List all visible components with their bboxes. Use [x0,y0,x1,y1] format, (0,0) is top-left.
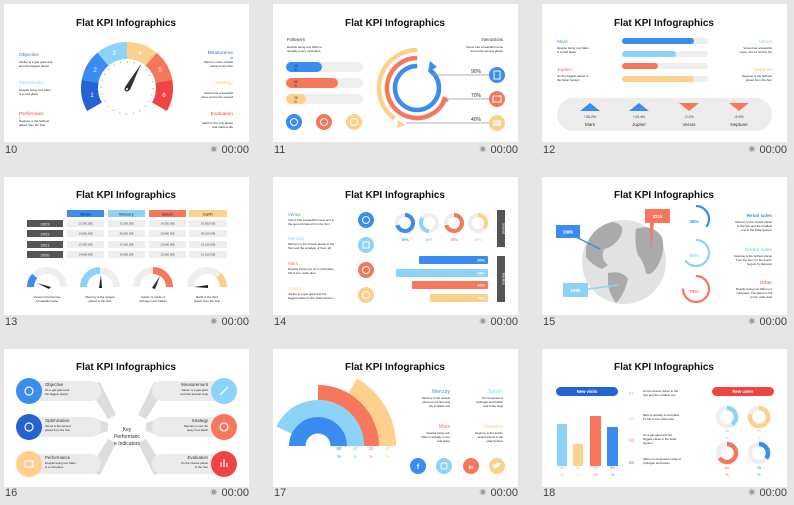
table: 16,650.00$ [201,222,215,226]
table: 14,600.00$ [78,252,93,256]
left list: Despite being red, it's a cold place, [288,267,335,271]
left text: Jupiter [557,67,572,73]
percent labels: 20 [385,446,390,451]
callouts [556,209,670,297]
table: Earth [203,212,213,216]
new visits: 55 [610,465,615,470]
title: Flat KPI Infographics [76,18,176,29]
slide 15: globe: 35% [689,219,699,224]
right texts: Measureme [208,50,233,56]
slide 14: donuts and bars: 70% [450,238,458,242]
slide 10: gauge: Despite being red, Mars [19,88,51,92]
text blocks: and it has rings [483,404,504,408]
table: 23,600.00$ [160,242,175,246]
left list: Mercury [288,236,305,241]
list: It's the closest planet to the [643,389,678,393]
title: Flat KPI Infographics [614,190,714,201]
percent labels [337,446,390,459]
connectors [88,382,166,475]
slide 10: gauge: 6 [162,92,166,99]
time 11: ✷ 00:00 [478,144,518,156]
center text: Key [123,427,132,433]
table: 15,600.00$ [160,252,175,256]
left list: the second planet from the Sun [288,222,330,226]
title: Flat KPI Infographics [345,362,445,373]
time 13: ✷ 00:00 [209,316,249,328]
slide 10: gauge: 5 [158,67,162,74]
trend pill [557,98,772,131]
right texts: Strategy [215,80,234,86]
circles [16,378,237,477]
trend pill: Neptune [730,122,748,127]
label 16: 16 [5,487,17,499]
left text: It's the biggest planet in [557,74,589,78]
table: 2022 [41,231,50,236]
slide 14: donuts and bars: 70% [401,238,409,242]
left texts: Optimizatio [19,80,43,86]
slide 10: gauge: name and is the second [201,95,233,99]
slide 11: followers/interactions: 70% [471,93,482,99]
table: 14,560.00$ [120,252,134,256]
table: 2023 [41,221,50,226]
list [629,389,681,465]
right text: to the Sun and the smallest [737,224,772,228]
list: Mars is actually a cold place, [643,413,680,417]
bars: 45 [294,64,298,68]
right text: Neptune is the farthest [742,74,772,78]
label 13: 13 [5,316,17,328]
right text: Venus [759,39,773,45]
bars: % [294,100,297,104]
icons [286,114,362,130]
right text [739,39,773,82]
text blocks: It's composed of [482,396,503,400]
right texts: Evaluation [211,111,233,117]
list: Saturn is composed mostly of [643,457,681,461]
list: It's a gas giant and the [643,433,672,437]
percent labels: % [337,454,341,459]
slide 11: followers/interactions [273,4,518,142]
title: Flat KPI Infographics [614,362,714,373]
slide 18: visits and users [542,349,787,487]
slide 10: gauge: planet to the Sun [210,64,233,68]
bars: 40% [477,296,486,300]
new users [712,387,774,477]
pills [29,381,224,474]
slide 13: table and gauges [4,177,249,315]
time 14: ✷ 00:00 [478,316,518,328]
bars: % [294,84,297,88]
text blocks: largest planet in the [478,435,503,439]
social icons: in [469,465,474,471]
slide 12: bars and trends [542,4,787,142]
list: 03 [629,438,635,443]
tabs: Mention [501,273,505,285]
texts: is a cold place [45,465,64,469]
trend pill: Mars [585,122,596,127]
table: Saturn [162,212,173,216]
right texts: nt [230,56,233,60]
left texts: n [19,84,21,88]
table: 14,250.00$ [160,222,175,226]
trend pill: +35.2% [584,115,597,119]
rings [364,35,470,141]
label 18: 18 [543,487,555,499]
left list: Jupiter [288,286,302,291]
right text: Online sales [745,247,772,252]
right text: of iron oxide dust [750,295,772,299]
bars: 65% [477,272,486,276]
new visits: 70 [593,465,598,470]
followers text: actually a very cold place [287,49,321,53]
left list: Venus has a beautiful name and is [288,218,334,222]
slide 11: followers/interactions: 90% [471,69,482,75]
table: 2020 [41,252,50,257]
slide 16: key performance indicators: Saturn is a gas giant [182,388,208,392]
label 10: 10 [5,144,17,156]
texts: It's a gas giant and [45,388,70,392]
text blocks: Mars [439,424,450,430]
new visits: % [576,472,580,477]
title: Flat KPI Infographics [345,190,445,201]
new users: % [725,472,729,477]
new users: 80 [757,428,762,433]
right text: cold place. The planet is full [736,291,772,295]
trend pill: Jupiter [632,122,646,127]
tabs [497,210,505,302]
new users: % [757,472,761,477]
percent labels: % [353,454,357,459]
center text: Performanc [114,434,140,440]
callouts: 288k [563,230,574,234]
table: 13,300.00$ [78,222,93,226]
title: Flat KPI Infographics [345,18,445,29]
text blocks: Mercury is the closest [422,396,450,400]
bars [286,62,363,104]
interactions text: Venus has a beautiful name [466,45,503,49]
bars [396,256,488,302]
left text: is a cold place [557,50,576,54]
texts: planet from the Sun [45,428,71,432]
center text [114,427,140,447]
trend pill: -2.2% [684,115,694,119]
percent labels: % [385,454,389,459]
bars [622,38,708,82]
text blocks [421,389,504,443]
table: 45,150.00$ [201,232,215,236]
slide 10: gauge: that harbors life [212,125,233,129]
bars: % [294,68,297,72]
rings [683,206,709,302]
slide 10: gauge: 4 [138,50,142,57]
text blocks: Neptune is the fourth- [475,431,503,435]
percent labels: 40 [353,446,358,451]
slide 10: gauge: Earth is the only planet [202,121,233,125]
left list: Sun and the smallest of them all [288,246,331,250]
text blocks: Neptune [484,424,503,430]
text blocks: the smallest one [429,404,450,408]
left list [288,212,335,300]
label 15: 15 [543,316,555,328]
new visits: 60 [560,465,565,470]
new users: % [725,435,729,440]
left text: the Solar System [557,78,580,82]
slide 13: table and gauges: a beautiful name [36,299,58,303]
new users: 65 [725,465,730,470]
list: 04 [629,460,635,465]
table [27,210,227,258]
right text: from the Sun. It's the fourth- [736,258,772,262]
social icons: f [417,464,420,471]
callouts: 321k [652,214,663,219]
slide 10: gauge: Venus has a beautiful [204,91,233,95]
left list: full of iron oxide dust [288,271,316,275]
new visits [556,387,618,477]
table: 14,560.00$ [78,232,93,236]
followers text: Followers [287,37,305,42]
list: 02 [629,416,635,421]
percent labels: 50 [337,446,342,451]
interactions text: Interactions [481,37,503,42]
texts: the biggest planet [45,392,68,396]
table: 2021 [41,242,50,247]
percent labels: 30 [369,446,374,451]
new visits: % [594,472,598,477]
lines [406,75,497,123]
bars: 65 [294,80,298,84]
slide 10: gauge: is a cold place [19,92,38,96]
label 17: 17 [274,487,286,499]
label 14: 14 [274,316,286,328]
right text: planet from the Sun [746,78,772,82]
left list: Mars [288,261,299,266]
text blocks: Mars is actually a very [421,435,451,439]
title: Flat KPI Infographics [614,18,714,29]
right text: Venus has a beautiful [743,46,772,50]
list: System [643,441,653,445]
table: 19,150.00$ [201,242,215,246]
text blocks: Mercury [432,389,450,395]
slide 13: table and gauges: Earth is the third [196,295,218,299]
texts [45,382,76,469]
table: 20,600.00$ [160,232,175,236]
new users: % [757,435,761,440]
slide 10: gauge: Mercury is the closest [204,60,233,64]
center text: e Indicators [114,441,140,447]
list: biggest planet in the Solar [643,437,676,441]
needle [125,64,141,90]
title: Flat KPI Infographics [76,362,176,373]
callouts: 189k [570,288,581,293]
slide 16: key performance indicators: It's the closest planet [181,461,208,465]
text blocks: planet to the Sun and [423,400,450,404]
right text: Neptune is the farthest planet [734,254,772,258]
bars: 60% [477,284,486,288]
table: Mercury [119,212,134,216]
slide 13: table and gauges: hydrogen and helium [139,299,168,303]
text blocks: cold place [437,439,450,443]
percent labels: % [369,454,373,459]
slide 10: gauge: 1 [90,92,94,99]
left texts: Objective [19,52,39,58]
slide 13: table and gauges: planet from the Sun [194,299,220,303]
trend pill: -6.9% [734,115,744,119]
slide 15: globe [542,177,787,315]
right text: Retail sales [747,213,772,218]
globe [582,220,666,304]
time 12: ✷ 00:00 [747,144,787,156]
slide 15: globe: 75% [689,289,699,294]
slide 16: key performance indicators: Evaluation [187,455,209,460]
slide 10: gauge: Neptune is the farthest [19,119,49,123]
trend pill: +15.4% [633,115,646,119]
slide 17: semicircle chart [273,349,518,487]
arcs [223,351,413,505]
followers text [287,37,322,53]
right texts [208,50,234,117]
right text [734,213,773,299]
right text: one in the Solar System [741,228,773,232]
new visits: New visits [577,389,598,394]
interactions text: and is the second planet [470,49,503,53]
time 15: ✷ 00:00 [747,316,787,328]
time 10: ✷ 00:00 [209,144,249,156]
texts: Objective [45,382,64,387]
left texts: Performanc [19,111,44,117]
texts: Performance [45,455,71,460]
left list: Mercury is the closest planet to the [288,242,335,246]
texts: Venus is the second [45,424,71,428]
new visits: % [611,472,615,477]
left list: biggest planet in the Solar System [288,296,334,300]
slide 14: donuts and bars: 35% [474,238,482,242]
right text: Despite being red, Mars is a [736,287,772,291]
slide 16: key performance indicators [4,349,249,487]
slide 16: key performance indicators: Neptune is very far [184,424,208,428]
slide 11: followers/interactions: 40% [471,117,482,123]
slide 13: table and gauges: Venus is hot but has [33,295,61,299]
list: hydrogen and helium [643,461,671,465]
slide 10: gauge: 2 [93,67,97,74]
right text: Mercury is the closest planet [735,220,772,224]
right text: name, but it's terribly hot [739,50,772,54]
left list: Venus [288,212,301,217]
text blocks: solar System [486,439,504,443]
list: 01 [629,391,635,396]
list: it's full of iron oxide dust [643,417,674,421]
text blocks: hydrogen and helium [476,400,504,404]
table: Venus [80,212,91,216]
followers text: Despite being red, Mars is [287,45,322,49]
gauges [30,264,230,310]
left text [557,39,589,82]
table: 45,560.00$ [120,232,134,236]
slide 10: gauge: 3 [112,50,116,57]
texts: Optimization [45,418,70,423]
slide 14: donuts and bars [273,177,518,315]
slide 16: key performance indicators: Strategy [192,418,209,423]
trend pill: Venus [683,122,696,127]
bars: 50% [477,258,486,262]
slide 13: table and gauges: Mercury is the closest [85,295,115,299]
tabs: Shared [501,223,505,234]
table: 13,300.00$ [78,242,93,246]
slide 13: table and gauges: planet to the Sun [89,299,112,303]
left texts: e [19,116,21,120]
label 11: 11 [274,144,285,156]
slide 16: key performance indicators: Measurement [181,382,209,387]
icons [358,212,374,303]
label 12: 12 [543,144,555,156]
slide 16: key performance indicators: and has several rings [181,392,209,396]
table: 13,300.00$ [120,222,134,226]
texts: Despite being red, Mars [45,461,76,465]
left text: Mars [557,39,568,45]
slide 10: gauge: planet from the Sun [19,123,46,127]
table: 17,560.00$ [120,242,134,246]
interactions text [466,37,503,53]
new users: 35 [757,465,762,470]
slide 13: table and gauges: Saturn is made of [141,295,165,299]
slide 10: gauge: Jupiter is a gas giant and [19,60,53,64]
text blocks: Despite being red, [427,431,450,435]
new visits: 30 [576,465,581,470]
left texts [19,52,44,120]
right text: Neptune [754,67,772,73]
slide 15: globe: 65% [689,253,699,258]
new users: New users [733,389,754,394]
left list: Jupiter is a gas giant and the [288,292,327,296]
new users: 40 [725,428,730,433]
slide 10: gauge [4,4,249,142]
social icons [410,458,505,474]
gauge [74,35,180,141]
slide 10: gauge: also the biggest planet [19,64,49,68]
right text: largest by diameter [747,262,772,266]
new visits: % [560,472,564,477]
slide 16: key performance indicators: away from Earth [187,428,208,432]
time 16: ✷ 00:00 [209,487,249,499]
title: Flat KPI Infographics [76,190,176,201]
list: Sun and the smallest one [643,393,676,397]
right icons [489,67,505,131]
time 18: ✷ 00:00 [747,487,787,499]
text blocks: Saturn [488,389,503,395]
slide 16: key performance indicators: to the Sun [195,465,208,469]
left text: Despite being red, Mars [557,46,589,50]
time 17: ✷ 00:00 [478,487,518,499]
slide 14: donuts and bars: 35% [425,238,433,242]
donuts [397,215,486,231]
bars: 25 [294,96,298,100]
right text: Other [760,280,772,285]
table: 16,150.00$ [201,252,215,256]
